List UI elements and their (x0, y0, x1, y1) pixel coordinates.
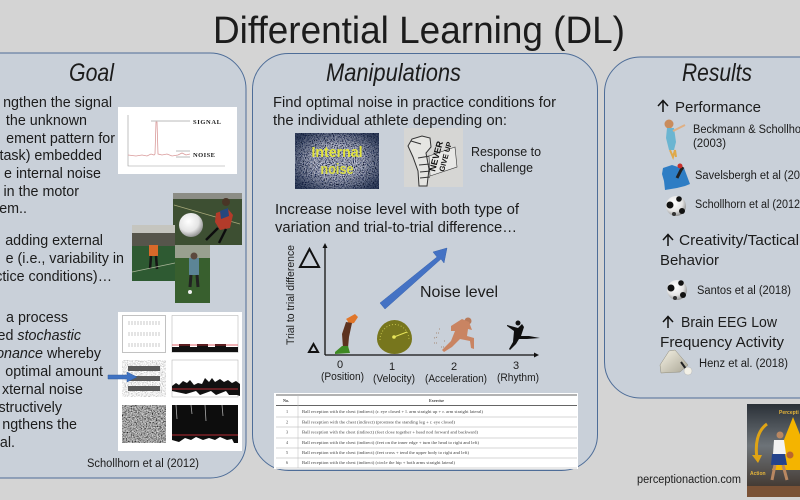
goal heading: Goal (69, 59, 115, 87)
icon: shuttlecock (660, 350, 692, 375)
brain EEG heading: Frequency Activity (660, 334, 785, 351)
goal panel background (0, 53, 246, 478)
exercise table: 5 (286, 450, 288, 455)
creativity heading: Creativity/Tactical (679, 232, 799, 249)
creativity heading: Behavior (660, 252, 719, 269)
icon: dancer (507, 320, 540, 350)
reference: Santos: Santos et al (2018) (697, 285, 791, 297)
results panel background (604, 57, 800, 398)
goal text: stochastic resonance: ngthens the (2, 417, 77, 433)
manipulations heading: Manipulations (326, 59, 461, 87)
goal text: strengthen the signal (0, 95, 115, 217)
response to challenge label: challenge (480, 161, 533, 175)
exercise table: Ball reception with the chest (indirect) (feet on the inner edge + turn the head to right and left) (302, 440, 480, 445)
goal text: strengthen the signal: ement pattern for (6, 131, 115, 147)
reference: Beckmann and Schollhorn (693, 124, 800, 150)
photo: kicker with ball (173, 193, 242, 245)
exercise table: 1 (286, 409, 288, 414)
large delta (300, 249, 319, 267)
panel c (122, 360, 166, 397)
goal text: strengthen the signal: em.. (0, 201, 27, 217)
results heading: Results (682, 59, 752, 87)
increase noise text (275, 201, 520, 236)
blue arrow pointing to figure (108, 372, 137, 382)
goal text: stochastic resonance: structively (0, 400, 63, 416)
exercise table (274, 393, 578, 469)
goal text: strengthen the signal: ngthen the signal (3, 95, 112, 111)
image: internal noise: noise (320, 161, 354, 178)
exercise table: 6 (286, 460, 288, 465)
book cover (747, 404, 800, 497)
x axis label 0 position (321, 359, 364, 383)
goal text: stochastic resonance: a process (6, 310, 68, 326)
image: internal noise: Internal (312, 144, 362, 161)
image: never give up fist (404, 128, 463, 187)
exercise table: 4 (286, 440, 289, 445)
goal text: stochastic resonance: ed stochastic (0, 328, 81, 344)
figure caption: Schollhorn et al (2012) (87, 458, 199, 470)
photo: goalkeeper (175, 245, 210, 303)
x axis label 2 acceleration (425, 361, 487, 385)
brain EEG heading: Brain EEG Low (681, 314, 777, 331)
panel: manipulations (252, 54, 598, 470)
panel d (172, 360, 240, 397)
goal text: adding external noise (0, 233, 124, 285)
x axis label 2 acceleration: (Acceleration) (425, 373, 487, 385)
increase noise text: variation and trial-to-trial difference… (275, 219, 517, 236)
goal text: strengthen the signal: task) embedded (0, 148, 102, 164)
icon: runner cartoon (664, 120, 685, 157)
panel b (172, 316, 238, 352)
reference: Beckmann and Schollhorn: (2003) (693, 138, 726, 150)
x axis label 1 velocity: 1 (389, 361, 395, 373)
icon: soccer ball (667, 280, 687, 300)
creativity heading (660, 232, 799, 269)
signal and noise chart: SIGNAL (193, 119, 222, 126)
x axis label 3 rhythm: 3 (513, 360, 519, 372)
y axis label: Trial to trial difference (285, 245, 297, 345)
goal text: strengthen the signal: e internal noise (4, 166, 101, 182)
increase noise text: Increase noise level with both type of (275, 201, 520, 218)
goal text: adding external noise: e (i.e., variability in (6, 251, 124, 267)
soccer photos (132, 193, 242, 303)
x axis label 2 acceleration: 2 (451, 361, 457, 373)
goal text: strengthen the signal: in the motor (4, 184, 79, 200)
exercise table: No. (283, 398, 289, 403)
exercise table: 3 (286, 430, 288, 434)
image: never give up fist: NEVER (427, 139, 445, 173)
goal text: strengthen the signal: the unknown (6, 113, 87, 129)
performance heading: Performance (675, 99, 761, 116)
image: internal noise (295, 133, 379, 189)
x axis label 0 position: 0 (337, 359, 343, 371)
exercise table: Ball reception with the chest (indirect) (prostrate the standing leg + r. eye closed) (302, 420, 456, 424)
icon: swimmer (662, 164, 690, 190)
signal and noise chart: NOISE (193, 152, 215, 159)
website label: perceptionaction.com (637, 474, 741, 486)
panel e (122, 405, 166, 443)
goal text: stochastic resonance: al. (0, 435, 15, 451)
panel a (122, 316, 166, 352)
diagonal blue arrow (380, 248, 447, 309)
noise level chart (285, 243, 540, 385)
exercise table: Exercise (429, 398, 444, 403)
manipulations panel background (252, 54, 598, 470)
icon: leg position (335, 314, 358, 354)
response to challenge label: Response to (471, 145, 541, 159)
brain EEG heading (660, 314, 785, 351)
exercise table: Ball reception with the chest (indirect) (r. eye closed + l. arm straight up + r. arm straight lateral) (302, 409, 484, 414)
photo: player in orange (132, 225, 175, 281)
exercise table: Ball reception with the chest (indirect) (circle the hip + both arms straight lateral) (302, 460, 456, 465)
exercise table: 2 (286, 420, 288, 424)
x axis label 0 position: (Position) (321, 371, 364, 383)
book cover: Action (750, 471, 766, 477)
reference: Henz: Henz et al. (2018) (699, 358, 788, 370)
icon: speedometer (377, 320, 412, 354)
book cover: Percepti (779, 410, 799, 416)
stochastic resonance figure (118, 312, 242, 451)
goal text: stochastic resonance: optimal amount (5, 364, 103, 380)
axis arrowheads (322, 243, 539, 358)
intro text (273, 94, 556, 129)
small delta (309, 344, 318, 352)
exercise table: Ball reception with the chest (indirect) (feet cross + tend the upper body to right and left) (302, 450, 470, 455)
panel f (172, 405, 238, 443)
signal and noise chart (118, 107, 237, 174)
x axis label 3 rhythm: (Rhythm) (497, 372, 539, 384)
panel: results (604, 57, 800, 398)
x axis label 1 velocity (373, 361, 415, 385)
panel: goal (0, 53, 246, 478)
chart axes (325, 245, 536, 355)
intro text: the individual athlete depending on: (273, 112, 507, 129)
icon: soccer ball (666, 196, 686, 216)
icon: sprinter (434, 318, 474, 352)
noise level label: Noise level (420, 284, 498, 301)
x axis label 3 rhythm (497, 360, 539, 384)
exercise table: Ball reception with the chest (indirect) (feet close together + head nod forward and backward) (302, 430, 479, 434)
goal text: stochastic resonance: xternal noise (2, 382, 83, 398)
goal text: stochastic resonance (0, 310, 103, 451)
intro text: Find optimal noise in practice conditions for (273, 94, 556, 111)
response to challenge label (471, 145, 541, 175)
x axis label 1 velocity: (Velocity) (373, 373, 415, 385)
goal text: adding external noise: adding external (5, 233, 103, 249)
image: never give up fist: GIVE UP (437, 141, 454, 173)
title: Differential Learning (DL) (213, 10, 625, 52)
